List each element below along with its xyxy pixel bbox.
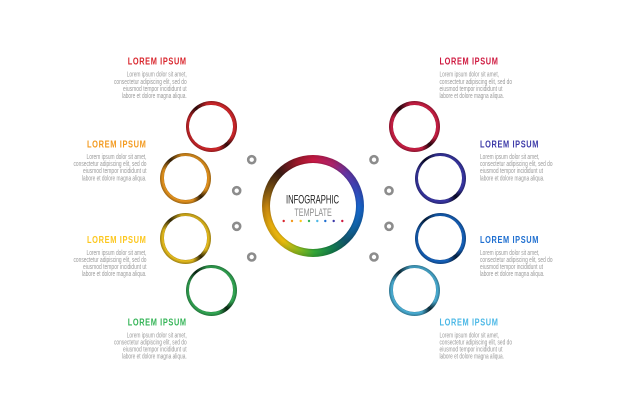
text block: step 7: LOREM IPSUM: [480, 234, 539, 246]
text block: step 8: consectetur adipiscing elit, sed do: [440, 339, 512, 346]
text block: step 4: labore et dolore magna aliqua.: [122, 354, 187, 360]
text block: step 5: Lorem ipsum dolor sit amet,: [440, 72, 499, 79]
ring: step 6 indigo: [414, 152, 466, 204]
text block: step 5: [440, 56, 512, 100]
text block: step 1: LOREM IPSUM: [128, 56, 187, 68]
text block: step 5: consectetur adipiscing elit, sed do: [440, 79, 512, 86]
ring: step 1 red: [186, 101, 236, 152]
text block: step 5: labore et dolore magna aliqua.: [440, 93, 504, 100]
ring: step 4 green: [186, 264, 236, 316]
text block: step 7: [480, 234, 553, 278]
text block: step 8: LOREM IPSUM: [440, 316, 498, 328]
connector dots: [233, 156, 392, 260]
text block: step 1: eiusmod tempor incididunt ut: [123, 86, 187, 93]
text block: step 1: Lorem ipsum dolor sit amet,: [127, 72, 187, 79]
text block: step 2: eiusmod tempor incididunt ut: [83, 168, 147, 175]
text block: step 3: labore et dolore magna aliqua.: [82, 271, 147, 278]
text block: step 8: [440, 316, 512, 360]
hub title: TEMPLATE: [294, 207, 332, 219]
text block: step 8: Lorem ipsum dolor sit amet,: [440, 332, 499, 339]
text block: step 2: labore et dolore magna aliqua.: [82, 175, 147, 182]
central hub ring: [262, 154, 364, 256]
text block: step 3: LOREM IPSUM: [87, 234, 146, 246]
text block: step 2: Lorem ipsum dolor sit amet,: [86, 154, 147, 161]
text block: step 3: consectetur adipiscing elit, sed do: [74, 257, 147, 264]
text block: step 6: eiusmod tempor incididunt ut: [480, 168, 543, 175]
hub title: INFOGRAPHIC: [286, 192, 339, 206]
text block: step 6: [480, 138, 553, 182]
text block: step 5: eiusmod tempor incididunt ut: [440, 86, 503, 93]
ring: step 3 yellow: [160, 212, 211, 264]
ring: step 7 blue: [414, 212, 466, 264]
text block: step 3: Lorem ipsum dolor sit amet,: [86, 250, 147, 257]
text block: step 4: LOREM IPSUM: [128, 316, 187, 328]
text block: step 7: labore et dolore magna aliqua.: [480, 271, 545, 278]
hub colour dots: [282, 220, 343, 222]
ring: step 2 orange: [160, 152, 211, 204]
text block: step 4: consectetur adipiscing elit, sed do: [114, 339, 187, 346]
text block: step 1: labore et dolore magna aliqua.: [122, 93, 187, 100]
text block: step 4: eiusmod tempor incididunt ut: [123, 346, 187, 354]
text block: step 8: eiusmod tempor incididunt ut: [440, 346, 503, 354]
text block: step 4: Lorem ipsum dolor sit amet,: [127, 332, 187, 339]
text block: step 8: labore et dolore magna aliqua.: [440, 354, 504, 360]
text block: step 2: [74, 138, 147, 182]
text block: step 3: eiusmod tempor incididunt ut: [83, 264, 147, 271]
ring: step 8 cyan: [389, 264, 440, 316]
text block: step 2: consectetur adipiscing elit, sed do: [74, 161, 147, 168]
text block: step 7: Lorem ipsum dolor sit amet,: [480, 250, 540, 257]
text block: step 3: [74, 234, 147, 278]
text block: step 5: LOREM IPSUM: [440, 56, 498, 68]
text block: step 7: eiusmod tempor incididunt ut: [480, 264, 543, 271]
text block: step 6: labore et dolore magna aliqua.: [480, 175, 545, 182]
text block: step 2: LOREM IPSUM: [87, 138, 146, 150]
text block: step 1: [114, 56, 187, 100]
text block: step 6: consectetur adipiscing elit, sed do: [480, 161, 553, 168]
text block: step 1: consectetur adipiscing elit, sed do: [114, 79, 187, 86]
text block: step 6: Lorem ipsum dolor sit amet,: [480, 154, 540, 161]
hub title: [286, 192, 339, 219]
text block: step 6: LOREM IPSUM: [480, 138, 539, 150]
text block: step 7: consectetur adipiscing elit, sed do: [480, 257, 553, 264]
text block: step 4: [114, 316, 187, 360]
ring: step 5 crimson: [389, 101, 440, 152]
